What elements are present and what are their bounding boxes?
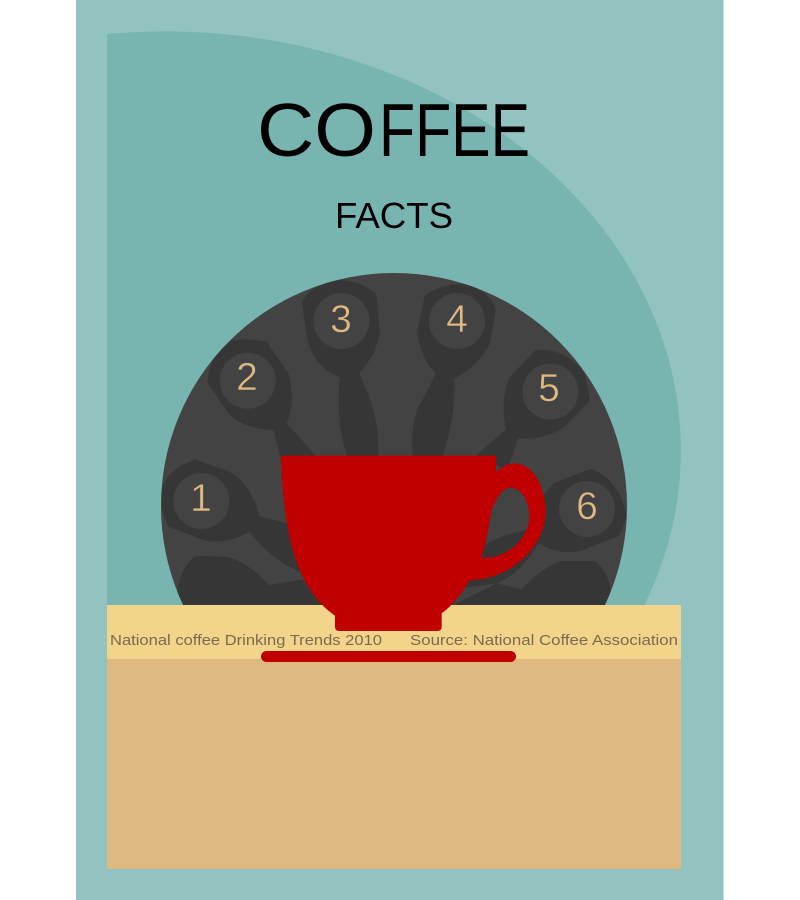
spoon 3 bbox=[302, 280, 380, 457]
background curved shape bbox=[107, 31, 681, 606]
number 5: 5 bbox=[538, 367, 560, 410]
icon: red coffee cup bbox=[261, 456, 546, 662]
number 4: 4 bbox=[446, 298, 468, 341]
spoon 5 bbox=[476, 350, 590, 470]
number 3: 3 bbox=[330, 298, 352, 341]
spoon 1 bbox=[161, 459, 302, 573]
caption: source: Source: National Coffee Association bbox=[410, 633, 678, 649]
table front bbox=[107, 659, 681, 869]
saucer bbox=[261, 651, 516, 662]
table top band bbox=[107, 605, 681, 659]
cup body and handle bbox=[281, 456, 546, 631]
number 6: 6 bbox=[576, 485, 598, 528]
subtitle: FACTS bbox=[335, 195, 453, 236]
title: CO bbox=[257, 88, 376, 172]
partial spoon bottom left bbox=[178, 556, 322, 605]
number 1: 1 bbox=[190, 477, 212, 520]
caption: trends: National coffee Drinking Trends 2010 bbox=[110, 633, 382, 649]
title: FFEE bbox=[379, 88, 530, 172]
spoon 6 bbox=[466, 469, 626, 588]
partial spoon bottom right bbox=[450, 561, 611, 607]
spoon 2 bbox=[208, 340, 317, 457]
spoons clipped to the circle bbox=[161, 280, 627, 607]
spoon 4 bbox=[412, 284, 496, 457]
number 2: 2 bbox=[236, 356, 258, 399]
panel: dark circle with spoons bbox=[161, 273, 627, 605]
